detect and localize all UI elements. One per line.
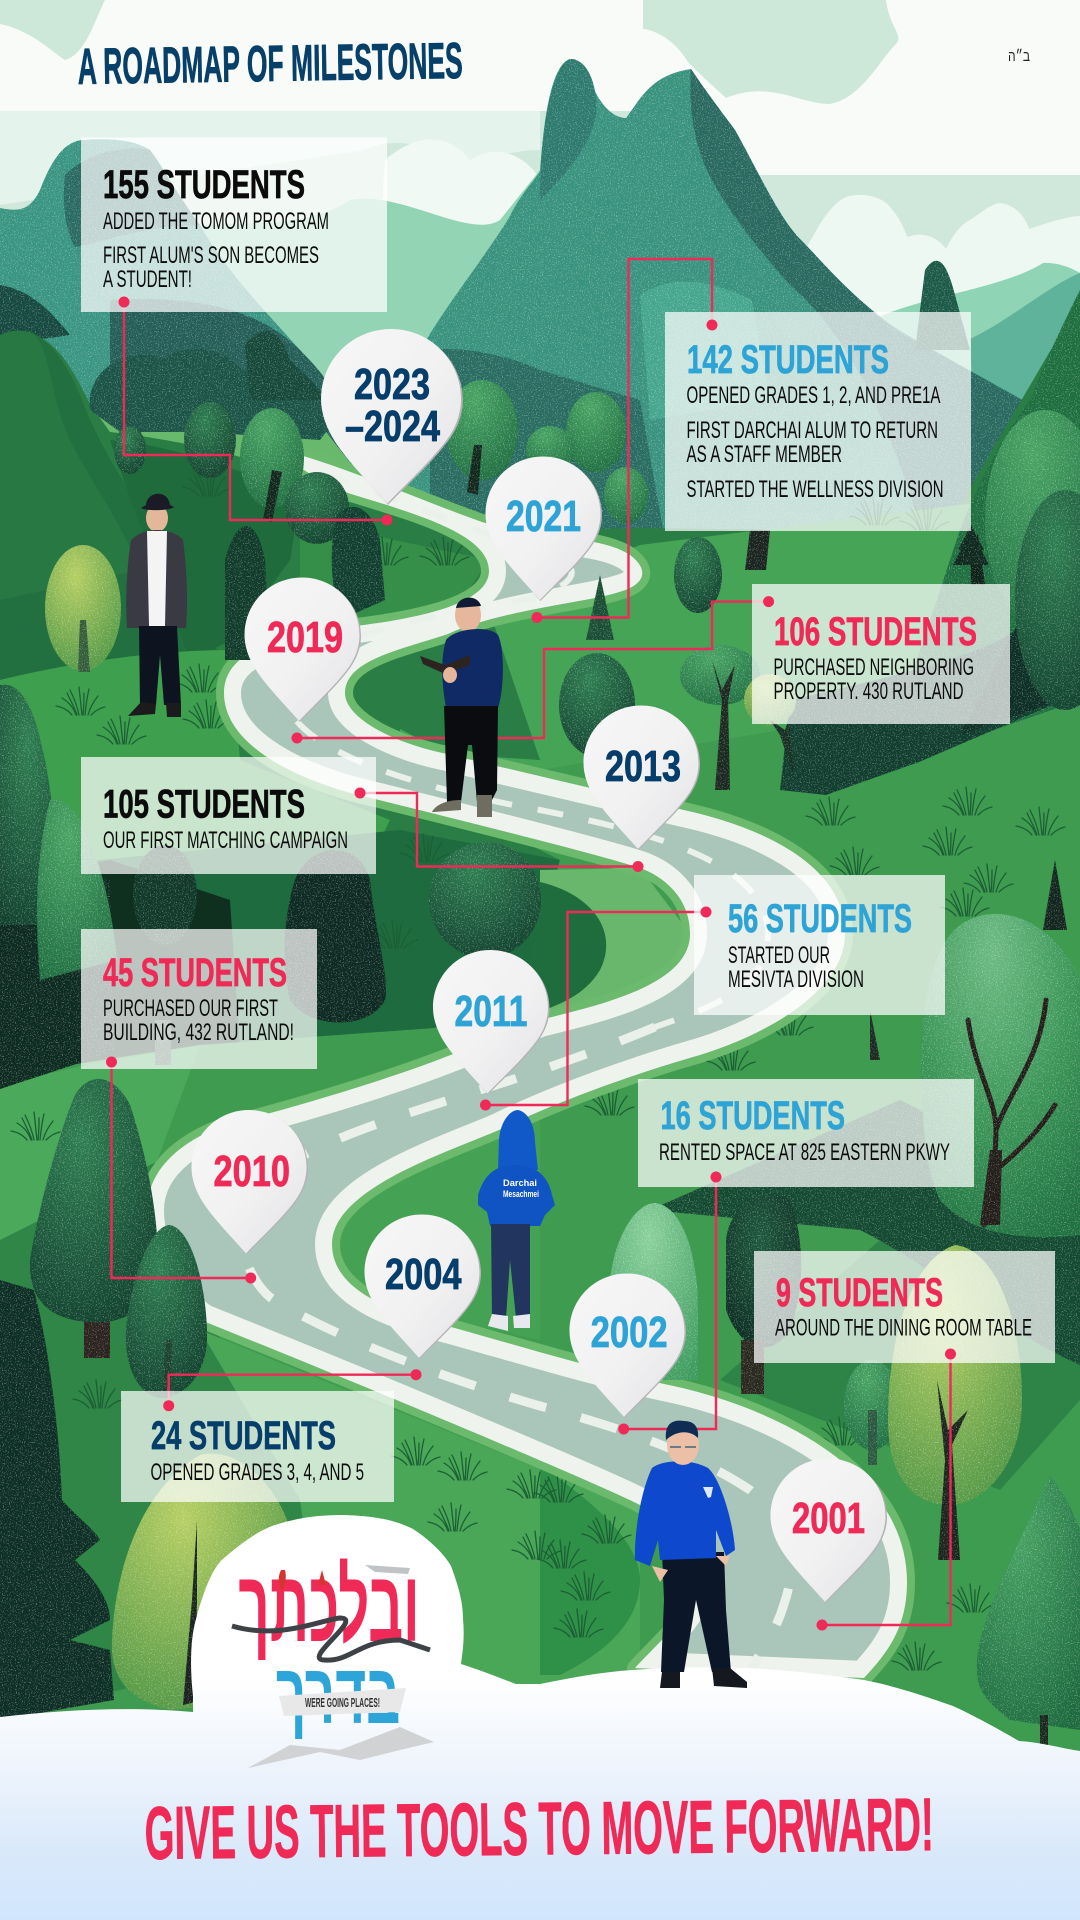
panel: 56 students: MESIVTA DIVISION bbox=[728, 966, 864, 993]
logo: road ribbon bbox=[232, 1618, 430, 1660]
title: A ROADMAP OF MILESTONES bbox=[77, 32, 463, 95]
pin: 2010 bbox=[192, 1110, 308, 1254]
pin: 2004: 2004 bbox=[385, 1250, 462, 1299]
panel: 155 students: ADDED THE TOMOM PROGRAM bbox=[103, 208, 329, 235]
endpoint dots on road bbox=[245, 514, 827, 1630]
tree: olive bottom left bbox=[112, 1454, 290, 1710]
tree: pine right bottom bbox=[977, 1476, 1080, 1745]
panel: 155 students bbox=[81, 138, 387, 312]
tree: small dark bbox=[126, 1225, 207, 1398]
person: boy in blue hoodie from behind bbox=[478, 1110, 555, 1331]
panel: 45 students bbox=[81, 929, 317, 1069]
panel: 155 students: A STUDENT! bbox=[103, 266, 192, 293]
tree: pale mint centre bbox=[609, 1203, 698, 1380]
person: boy in black hat bbox=[126, 494, 187, 717]
panel: 105 students: OUR FIRST MATCHING CAMPAIGN bbox=[103, 827, 348, 854]
pin: 2002: 2002 bbox=[591, 1308, 668, 1357]
pin: 2001 bbox=[770, 1458, 887, 1603]
pin: 2019 bbox=[244, 578, 361, 722]
connector lines bbox=[112, 259, 950, 1625]
logo: pink hebrew word: ובלכתך bbox=[238, 1550, 420, 1663]
grass tufts bbox=[11, 468, 1065, 1670]
tree: large right bbox=[921, 914, 1080, 1237]
logo: plane bbox=[365, 1565, 410, 1574]
snow foreground bbox=[0, 1515, 1080, 1920]
pin: 2013: 2013 bbox=[605, 742, 681, 791]
dark forest right bbox=[0, 290, 1080, 1365]
person: boy reading book bbox=[420, 598, 503, 817]
panel: 155 students: FIRST ALUM'S SON BECOMES bbox=[103, 242, 319, 269]
tree: pine mid right bbox=[726, 1194, 801, 1394]
tree cluster: upper hill bbox=[90, 331, 385, 660]
panel: 56 students: 56 STUDENTS bbox=[728, 897, 912, 941]
tree: dark rounded left bbox=[30, 1079, 158, 1358]
pins bbox=[192, 329, 887, 1603]
panel: 24 students bbox=[121, 1391, 394, 1502]
tree cluster: centre bbox=[429, 645, 1067, 958]
pin: 2001: 2001 bbox=[792, 1494, 865, 1543]
road shoulder bbox=[147, 455, 907, 1678]
person: boy in blue hoodie from behind: Darchai bbox=[503, 1178, 537, 1188]
tree cluster: left forest bbox=[0, 685, 386, 1065]
tree: trunk behind panel bbox=[870, 1010, 880, 1060]
pin: 2011 bbox=[433, 950, 550, 1094]
panel: 105 students bbox=[81, 757, 376, 874]
logo: pins bbox=[279, 1570, 326, 1592]
logo bbox=[232, 1550, 434, 1768]
hebrew mark: ב״ה bbox=[1008, 48, 1030, 65]
panel: 155 students: 155 STUDENTS bbox=[103, 163, 305, 207]
panel: 45 students: BUILDING, 432 RUTLAND! bbox=[103, 1019, 294, 1046]
pin: 2021 bbox=[486, 456, 602, 601]
panel: 16 students: 16 STUDENTS bbox=[660, 1094, 845, 1138]
panel: 45 students: PURCHASED OUR FIRST bbox=[103, 995, 278, 1022]
panel: 24 students: 24 STUDENTS bbox=[151, 1414, 336, 1458]
tree: olive left bbox=[45, 545, 121, 672]
panel: 9 students bbox=[754, 1251, 1055, 1363]
pin: 2021: 2021 bbox=[506, 492, 581, 541]
pin: 2002 bbox=[570, 1274, 686, 1418]
panel: 56 students: STARTED OUR bbox=[728, 942, 830, 969]
panel: 9 students: 9 STUDENTS bbox=[776, 1271, 943, 1315]
panel: 142 students bbox=[665, 312, 971, 531]
panel: 106 students bbox=[752, 584, 1010, 724]
far hills bbox=[100, 170, 1080, 560]
pin: 2023-2024: –2024 bbox=[345, 402, 440, 451]
panel: 106 students: PROPERTY. 430 RUTLAND bbox=[774, 678, 964, 705]
tree: olive right bbox=[888, 1245, 1022, 1560]
panel: 56 students bbox=[694, 875, 945, 1015]
tree cluster: near pin 2021 bbox=[446, 380, 770, 640]
pin: 2023-2024: 2023 bbox=[354, 360, 430, 409]
panel: 105 students: 105 STUDENTS bbox=[103, 782, 305, 826]
mountains bbox=[0, 59, 1040, 560]
trees bbox=[0, 261, 1080, 1745]
tree: big pine bottom left bbox=[0, 1280, 114, 1720]
pin: 2010: 2010 bbox=[214, 1147, 290, 1196]
winding road bbox=[147, 455, 907, 1678]
panel: 16 students bbox=[638, 1079, 974, 1187]
pin: 2011: 2011 bbox=[454, 987, 528, 1036]
person: boy in blue hoodie front bbox=[635, 1421, 747, 1688]
panel: 106 students: 106 STUDENTS bbox=[774, 610, 977, 654]
panel: 45 students: 45 STUDENTS bbox=[103, 951, 287, 995]
pin: 2013 bbox=[584, 706, 700, 850]
tree cluster: upper right forest bbox=[915, 261, 1080, 710]
logo: banner bbox=[279, 1688, 406, 1716]
green valley ground bbox=[0, 300, 1080, 1760]
panel: 24 students: OPENED GRADES 3, 4, AND 5 bbox=[150, 1459, 364, 1486]
logo: map bbox=[248, 1727, 434, 1768]
pin: 2004 bbox=[364, 1214, 481, 1359]
pin: 2023-2024 bbox=[321, 329, 463, 505]
tree: small mid bbox=[844, 1360, 900, 1465]
panel: 142 students: AS A STAFF MEMBER bbox=[686, 441, 842, 468]
logo: banner: WERE GOING PLACES! bbox=[305, 1695, 380, 1710]
pin: 2019: 2019 bbox=[267, 613, 343, 662]
person: boy in blue hoodie from behind: Mesachmei bbox=[503, 1189, 539, 1199]
logo: blue hebrew word: בדרך bbox=[276, 1646, 400, 1742]
panel: 142 students: 142 STUDENTS bbox=[687, 338, 889, 382]
